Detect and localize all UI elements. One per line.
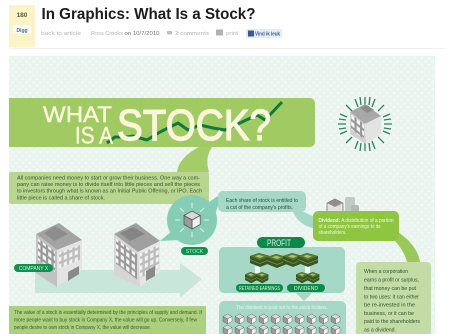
text block: profit uses: paid to the shareholders	[364, 319, 420, 325]
banner: what is a stock: IS A	[75, 122, 113, 150]
text block: each share: a cut of the company's profits.	[226, 205, 293, 211]
panel: shareholders	[219, 293, 346, 334]
text block: each share: Each share of stock is entitled to	[226, 198, 298, 204]
callout: dividend definition: shareholders.	[318, 230, 346, 236]
article meta line: on 10/7/2010	[124, 31, 160, 37]
text block: profit uses: be re-invested in the	[364, 302, 415, 308]
connectors	[255, 266, 260, 273]
text block: stock value	[9, 306, 206, 334]
article meta line: Ross Crooks	[91, 31, 124, 37]
digg counter: Digg	[16, 28, 28, 34]
panel: shareholders: The dividend is paid out to the stock holders.	[236, 305, 328, 311]
banner: what is a stock: STOCK?	[117, 101, 271, 150]
callout: dividend definition	[313, 211, 420, 262]
text block: profit uses: that money can be put	[364, 286, 416, 292]
text block: profit uses: earns a profit or surplus,	[364, 278, 419, 284]
label: dividend: DIVIDEND	[294, 286, 318, 292]
page header	[9, 5, 445, 49]
text block: stock value: more people want to buy stock in Company X, the value will go up. Conversely, if few	[14, 318, 197, 324]
label: stock: STOCK	[186, 249, 204, 255]
article meta line	[41, 29, 282, 38]
money stacks	[245, 253, 319, 283]
callout: stock circle	[160, 195, 218, 245]
banner: what is a stock: WHAT	[43, 102, 112, 127]
digg counter: 180	[17, 12, 28, 19]
text block: profit uses: When a corporation	[364, 269, 408, 275]
panel: profit	[219, 237, 345, 293]
text block: stock value: The value of a stock is essentially determined by the principles of supply and demand. If	[14, 310, 203, 316]
label: stock	[181, 247, 208, 255]
text block: stock value: people desire to own stock in Company X, the value will decrease.	[14, 325, 151, 331]
article meta line: Vind ik leuk	[255, 32, 280, 38]
article meta line: back to article	[41, 31, 81, 37]
text block: intro: pany can raise money is to divide itself into little pieces and sell the pieces	[17, 182, 200, 188]
text block: intro: All companies need money to start or grow their business. One way a com-	[17, 176, 200, 182]
icon: stacked coins and cube	[327, 197, 359, 216]
text block: profit uses: to two uses: it can either	[364, 294, 419, 300]
label: company x: COMPANY X	[19, 266, 49, 272]
infographic background	[9, 56, 435, 334]
digg counter	[9, 5, 35, 47]
text block: intro: to investors through what is known as an Initial Public Offering, or IPO. Each	[17, 188, 202, 194]
rising stock line	[107, 102, 282, 143]
heading: profit: PROFIT	[267, 238, 291, 248]
text block: profit uses: as a dividend.	[364, 328, 396, 334]
arrow: company to stock growth	[35, 263, 202, 298]
label: retained earnings: RETAINED EARNINGS	[239, 286, 281, 292]
article meta line: print	[226, 31, 239, 37]
callout: dividend definition: Dividend: A distribution of a portion	[318, 218, 394, 224]
banner: what is a stock	[9, 98, 315, 172]
text block: each share	[218, 191, 316, 229]
building: company x	[36, 223, 82, 287]
text block: profit uses	[356, 262, 431, 334]
shareholder cubes	[223, 314, 340, 334]
label: company x	[14, 264, 53, 272]
article title: In Graphics: What Is a Stock?	[42, 6, 256, 23]
building: company x with divided shares	[114, 223, 160, 287]
text block: intro	[9, 172, 209, 204]
text block: profit uses: business, or it can be	[364, 311, 414, 317]
icon: office building with rays	[338, 97, 392, 151]
article meta line: 2 comments	[175, 31, 210, 37]
text block: intro: little piece is called a share of stock.	[17, 196, 105, 202]
callout: dividend definition: of a company's earnings to its	[318, 224, 381, 230]
